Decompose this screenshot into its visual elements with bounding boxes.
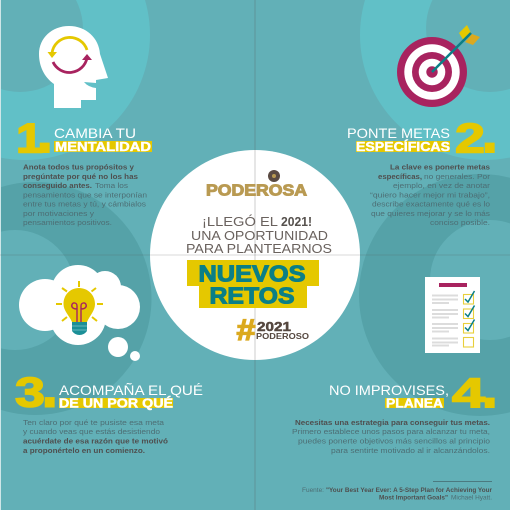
hashtag 2021 poderoso [236, 314, 309, 347]
text block 2: describe exactamente qué es lo [372, 202, 490, 208]
heading: 2 ponte metas especificas: PONTE METAS [347, 125, 450, 141]
panel: center message [186, 170, 332, 347]
panel: step 4 [292, 277, 499, 455]
icon: thought cloud with light bulb [19, 265, 140, 361]
text block 1: conseguido antes. [23, 183, 92, 190]
text block 2 [370, 164, 491, 227]
intro heading: 2021! [281, 215, 312, 229]
intro heading: PARA PLANTEARNOS [186, 242, 332, 256]
icon: checklist [425, 277, 480, 353]
text block 4: Primero establece unos pasos para alcanzar tu meta, [292, 429, 490, 436]
heading: 2 ponte metas especificas [347, 90, 499, 168]
heading: 4 no improvises planea [329, 345, 499, 423]
intro heading: ¡LLEGÓ EL [202, 214, 278, 229]
text block 1: entre tus metas y tú, y cámbialos [23, 202, 147, 208]
text block 1: Toma los [95, 183, 129, 190]
source note [302, 481, 493, 502]
text block 2: “quiero hacer mejor mi trabajo”, [370, 192, 490, 200]
heading: 3 acompana el que: . [40, 344, 59, 422]
text block 1: por motivaciones y [23, 211, 95, 218]
panel: step 1 [16, 26, 152, 227]
heading: 1 cambia tu mentalidad: MENTALIDAD [55, 139, 151, 154]
text block 1: pregúntate por qué no los has [23, 174, 138, 181]
source note: Michael Hyatt. [451, 496, 492, 502]
text block 2: específicas, [378, 174, 422, 181]
text block 4: para sentirte motivado al ir alcanzándolos. [331, 448, 490, 455]
heading: 1 cambia tu mentalidad: . [35, 90, 54, 168]
logo Poderosa [206, 170, 307, 200]
text block 4: puedes ponerte objetivos más sencillos al principio [298, 438, 490, 446]
text block 4 [292, 420, 490, 455]
icon: target with arrow [397, 25, 480, 107]
text block 1 [23, 164, 147, 227]
text block 2: no generales. Por [424, 174, 491, 181]
hashtag 2021 poderoso: 2021 [257, 319, 291, 334]
title: nuevos retos [187, 260, 319, 308]
text block 1: pensamientos positivos. [23, 220, 112, 227]
heading: 2 ponte metas especificas: 2 [455, 114, 485, 162]
panel: step 2 [347, 25, 499, 227]
heading: 4 no improvises planea: 4 [452, 370, 486, 416]
heading: 2 ponte metas especificas: . [480, 90, 499, 168]
title: nuevos retos: RETOS [210, 282, 294, 308]
text block 3: y cuando veas que estás desistiendo [23, 429, 160, 436]
title: nuevos retos: NUEVOS [198, 260, 306, 286]
text block 3: acuérdate de esa razón que te motivó [23, 438, 168, 446]
text block 4: Necesitas una estrategia para conseguir tus metas. [295, 420, 490, 427]
text block 3: Ten claro por qué te pusiste esa meta [23, 420, 164, 427]
text block 3 [23, 420, 168, 455]
center white circle [150, 150, 360, 360]
heading: 3 acompana el que: DE UN POR QUÉ [59, 396, 174, 410]
heading: 3 acompana el que [15, 344, 203, 422]
text block 2: que quieres mejorar y se lo más [371, 211, 491, 218]
heading: 4 no improvises planea: . [480, 345, 499, 423]
heading: 2 ponte metas especificas: ESPECÍFICAS [356, 139, 450, 154]
heading: 1 cambia tu mentalidad: CAMBIA TU [54, 125, 136, 141]
text block 1: Anota todos tus propósitos y [23, 164, 134, 172]
text block 2: ejemplo, en vez de anotar [393, 183, 491, 190]
text block 2: La clave es ponerte metas [390, 164, 490, 172]
heading: 4 no improvises planea: PLANEA [386, 396, 443, 410]
heading: 3 acompana el que: ACOMPAÑA EL QUÉ [59, 382, 203, 398]
source note: "Your Best Year Ever: A 5-Step Plan for Achieving Your [326, 488, 493, 494]
heading: 1 cambia tu mentalidad: 1 [16, 114, 43, 162]
heading: 4 no improvises planea: NO IMPROVISES, [329, 382, 449, 398]
heading: 3 acompana el que: 3 [15, 368, 45, 416]
intro heading [186, 214, 332, 256]
hashtag 2021 poderoso: PODEROSO [256, 332, 309, 341]
text block 1: pensamientos que se interponían [23, 192, 147, 200]
text block 3: a proponértelo en un comienzo. [23, 448, 145, 455]
intro heading: UNA OPORTUNIDAD [191, 229, 328, 243]
hashtag 2021 poderoso: # [236, 314, 255, 347]
source note: Most Important Goals" [379, 496, 448, 502]
logo Poderosa: PODEROSA [206, 182, 307, 200]
source note: Fuente: [302, 488, 324, 494]
heading: 1 cambia tu mentalidad [16, 90, 152, 168]
panel: step 3 [15, 265, 203, 455]
text block 2: conciso posible. [430, 220, 490, 227]
icon: head with cycle arrows [39, 26, 108, 108]
